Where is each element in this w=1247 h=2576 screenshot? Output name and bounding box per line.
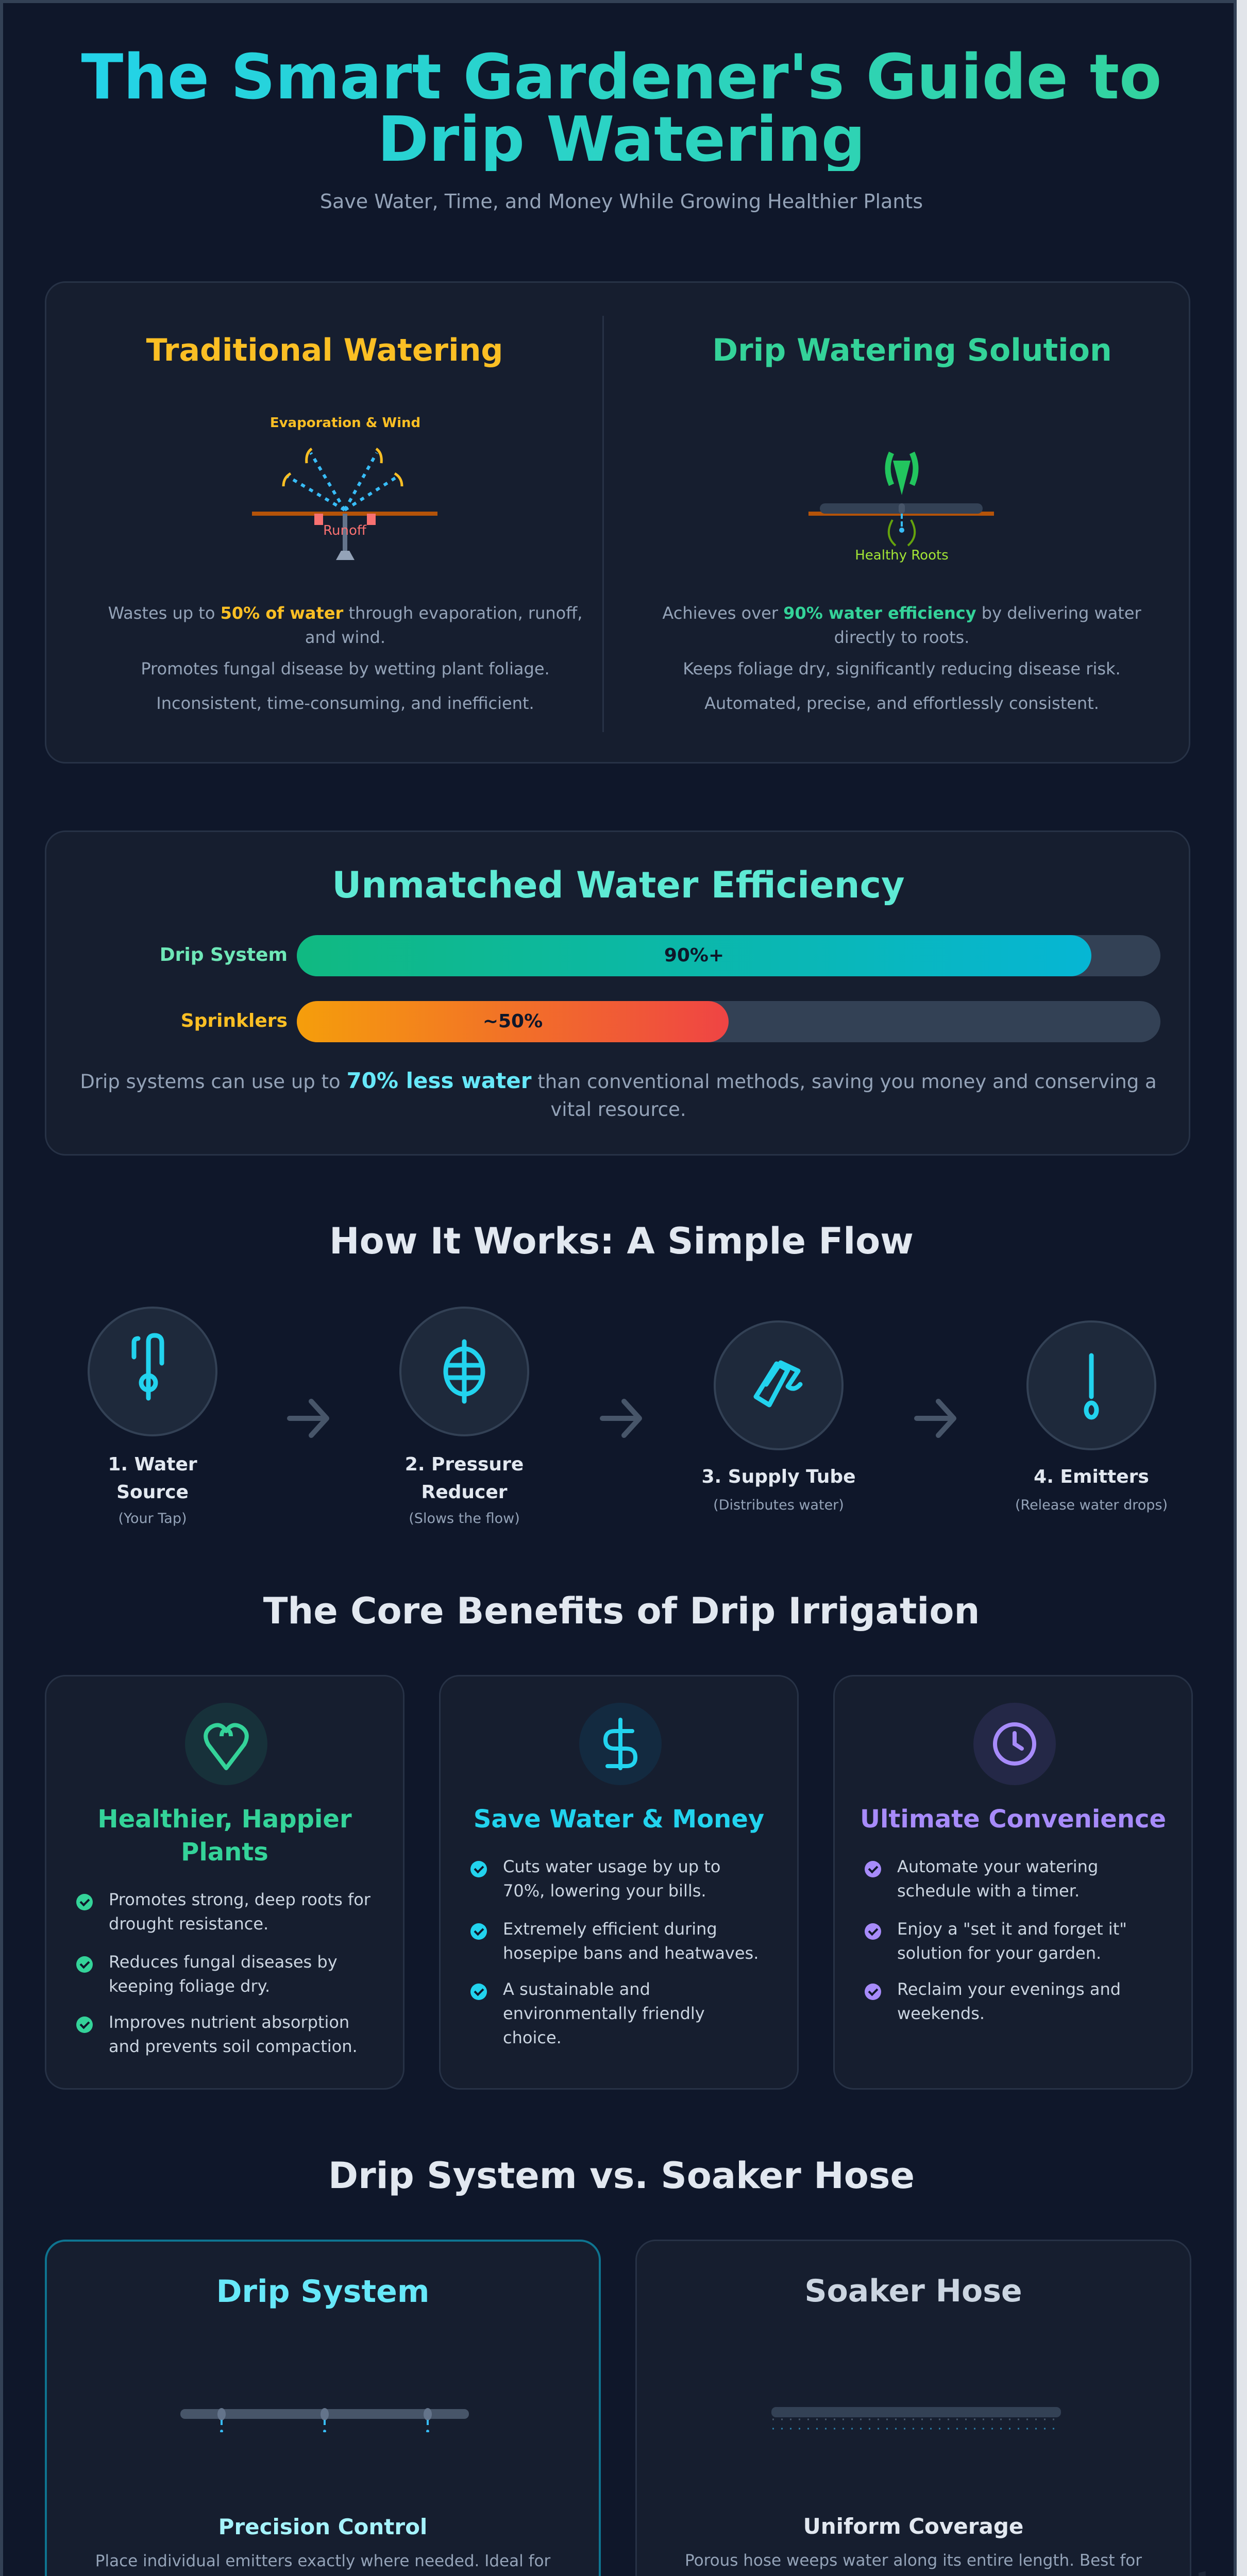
heading: traditional watering: Traditional Watering bbox=[146, 332, 503, 368]
bullets: Promotes strong, deep roots for drought resistance. bbox=[109, 1890, 370, 1934]
bullets bbox=[835, 1850, 1191, 2066]
label: Reducer bbox=[421, 1482, 508, 1503]
card: soaker hose bbox=[635, 2240, 1191, 2576]
illustration: sprinkler: Runoff bbox=[323, 523, 367, 538]
bullets: Reclaim your evenings and weekends. bbox=[897, 1979, 1121, 2023]
subheading: Precision Control bbox=[218, 2514, 427, 2539]
panel: comparison traditional vs drip: Keeps foliage dry, significantly reducing disease risk. bbox=[683, 659, 1121, 679]
bullets: Enjoy a "set it and forget it" solution for your garden. bbox=[897, 1919, 1127, 1963]
panel: water efficiency bbox=[45, 831, 1190, 1156]
heading: drip watering solution: Drip Watering Solution bbox=[712, 332, 1112, 368]
flow step 3 bbox=[701, 1320, 856, 1513]
flow step 4: (Release water drops) bbox=[1015, 1497, 1168, 1513]
illustration: sprinkler: Evaporation & Wind bbox=[270, 415, 420, 431]
subtitle: Save Water, Time, and Money While Growing Healthier Plants bbox=[320, 190, 923, 213]
title: Plants bbox=[181, 1838, 268, 1867]
bullets: Improves nutrient absorption and prevents soil compaction. bbox=[109, 2012, 358, 2056]
flow step 3: (Distributes water) bbox=[713, 1497, 844, 1513]
icon: supply tube bbox=[714, 1320, 844, 1450]
bullets: A sustainable and environmentally friendly choice. bbox=[503, 1979, 705, 2047]
illustration: soaker hose bbox=[768, 2401, 1062, 2432]
bullets bbox=[470, 1857, 759, 2047]
bar: drip system bbox=[160, 935, 1160, 976]
label: 1. Water bbox=[108, 1454, 197, 1475]
bullets: Reduces fungal diseases by keeping foliage dry. bbox=[109, 1952, 338, 1996]
bar: drip system: 90%+ bbox=[664, 945, 724, 966]
title bbox=[3, 46, 1240, 171]
flow step 1: (Your Tap) bbox=[119, 1511, 187, 1527]
illustration: drip: Healthy Roots bbox=[855, 548, 949, 563]
bar: sprinklers bbox=[181, 1001, 1160, 1042]
card: save water and money bbox=[439, 1675, 799, 2090]
flow step 1 bbox=[88, 1307, 217, 1527]
bar: drip system: Drip System bbox=[160, 944, 288, 965]
card: healthier plants bbox=[45, 1675, 405, 2090]
illustration: drip tube bbox=[178, 2401, 472, 2432]
bullets: Automate your watering schedule with a timer. bbox=[897, 1857, 1098, 1901]
title: Ultimate Convenience bbox=[860, 1805, 1166, 1834]
title bbox=[97, 1805, 352, 1867]
subheading: Uniform Coverage bbox=[803, 2514, 1023, 2539]
bullets: Cuts water usage by up to 70%, lowering your bills. bbox=[503, 1857, 720, 1901]
heading: how it works: How It Works: A Simple Flow bbox=[329, 1220, 914, 1262]
arrow 3 bbox=[914, 1399, 956, 1438]
title: Save Water & Money bbox=[474, 1805, 764, 1834]
illustration: sprinkler bbox=[252, 415, 437, 560]
panel: comparison traditional vs drip: Inconsistent, time-consuming, and inefficient. bbox=[156, 693, 534, 713]
arrow 2 bbox=[600, 1399, 642, 1438]
heading: core benefits: The Core Benefits of Drip Irrigation bbox=[263, 1590, 980, 1632]
label bbox=[405, 1454, 524, 1503]
title: Drip Watering bbox=[377, 104, 866, 176]
flow step 2: (Slows the flow) bbox=[409, 1511, 520, 1527]
icon: tap bbox=[88, 1307, 217, 1436]
caption: Drip systems can use up to 70% less water than conventional methods, saving you money and conserving a vital resource. bbox=[80, 1068, 1157, 1121]
bullets: Extremely efficient during hosepipe bans and heatwaves. bbox=[503, 1919, 759, 1963]
bar chart bbox=[160, 935, 1160, 1042]
label: 2. Pressure bbox=[405, 1454, 524, 1475]
title: Healthier, Happier bbox=[97, 1805, 352, 1834]
flow step 4 bbox=[1015, 1320, 1168, 1513]
arrow 1 bbox=[287, 1399, 329, 1438]
text: drip points: Achieves over 90% water efficiency by delivering water directly to roots. bbox=[662, 603, 1141, 647]
flow step 2 bbox=[399, 1307, 529, 1527]
heading: drip vs soaker: Drip System vs. Soaker Hose bbox=[328, 2155, 915, 2197]
label bbox=[108, 1454, 197, 1503]
icon: clock bbox=[973, 1703, 1056, 1785]
bar: sprinklers: Sprinklers bbox=[181, 1010, 288, 1031]
heading: Unmatched Water Efficiency bbox=[332, 864, 905, 906]
icon: heart bbox=[185, 1703, 267, 1785]
title: The Smart Gardener's Guide to bbox=[81, 42, 1161, 113]
divider bbox=[602, 316, 604, 732]
bullets bbox=[76, 1890, 370, 2056]
icon: dollar bbox=[579, 1703, 662, 1785]
label: Source bbox=[116, 1482, 189, 1503]
panel: comparison traditional vs drip: Automated, precise, and effortlessly consistent. bbox=[704, 693, 1099, 713]
label: 4. Emitters bbox=[1034, 1466, 1149, 1487]
title: Drip System bbox=[216, 2274, 429, 2310]
text: traditional points: Wastes up to 50% of water through evaporation, runoff, and wind. bbox=[108, 603, 582, 647]
bar: sprinklers: ~50% bbox=[483, 1011, 543, 1032]
card: ultimate convenience bbox=[833, 1675, 1193, 2090]
icon: emitter bbox=[1026, 1320, 1156, 1450]
card: drip system bbox=[45, 2240, 601, 2576]
title: Soaker Hose bbox=[804, 2273, 1022, 2309]
panel: comparison traditional vs drip: Promotes fungal disease by wetting plant foliage. bbox=[141, 659, 550, 679]
panel: comparison traditional vs drip bbox=[45, 281, 1190, 764]
label: 3. Supply Tube bbox=[701, 1466, 856, 1487]
illustration: drip bbox=[808, 451, 994, 563]
icon: pressure reducer bbox=[399, 1307, 529, 1436]
